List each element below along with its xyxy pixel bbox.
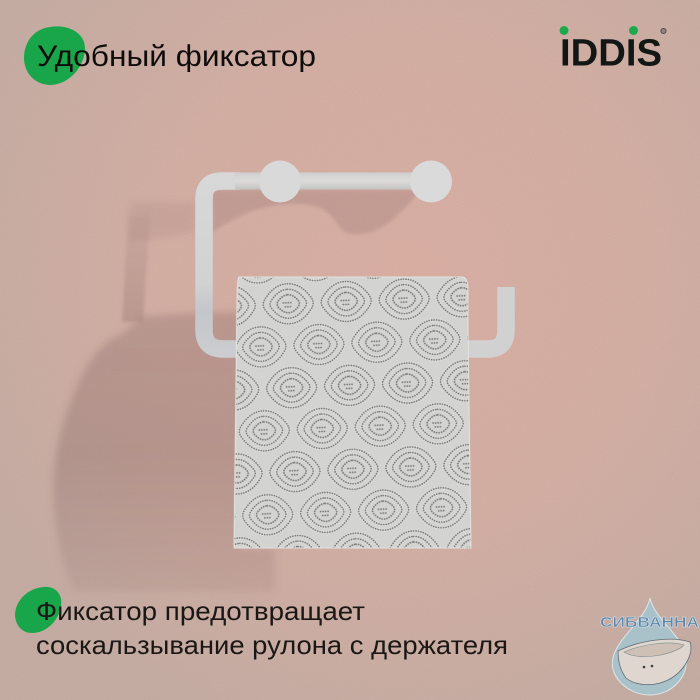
- shadow of the roll and holder: [54, 190, 416, 592]
- watermark bathtub: [618, 639, 691, 685]
- watermark: Sibvanna: [600, 598, 699, 695]
- shadow: arm stem: [122, 215, 150, 322]
- title: Удобный фиксатор: [37, 40, 316, 73]
- logo: IDDIS: IDDIS: [560, 32, 662, 74]
- holder: right hook: [465, 287, 506, 349]
- holder: left arm: [204, 181, 242, 349]
- watermark name: СИБВАННА: [600, 614, 699, 631]
- shadow: left arm: [128, 202, 196, 240]
- paper roll: [234, 277, 471, 548]
- holder: left round mount: [259, 160, 301, 202]
- description text: Фиксатор предотвращает: [36, 596, 365, 626]
- holder: right round mount: [410, 160, 452, 202]
- registered mark: [661, 28, 666, 34]
- watermark drop: [612, 598, 687, 695]
- holder: top bar: [235, 172, 415, 190]
- toilet paper holder: [204, 160, 506, 349]
- green blob behind title: [24, 26, 85, 85]
- green blob behind description: [15, 587, 61, 633]
- shadow: top bar: [212, 190, 416, 234]
- description text: соскальзывание рулона с держателя: [36, 630, 508, 660]
- shadow: roll: [54, 312, 275, 592]
- watermark face: [643, 665, 653, 668]
- description text: [36, 596, 508, 660]
- logo dots: [560, 26, 638, 35]
